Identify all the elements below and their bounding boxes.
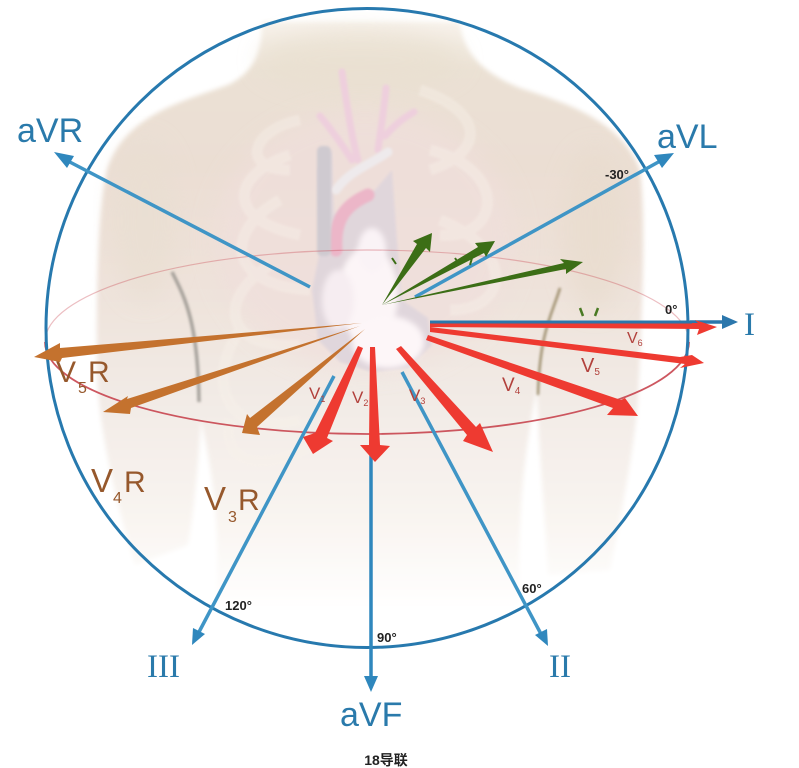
arrow: V3R bbox=[242, 329, 365, 435]
label: V1: 1 bbox=[320, 394, 325, 404]
heart illustration bbox=[312, 72, 432, 372]
label: aVF: aVF bbox=[340, 696, 402, 734]
label: V3: 3 bbox=[420, 396, 425, 406]
right-sided labels bbox=[56, 356, 260, 526]
label: V2: 2 bbox=[363, 398, 368, 408]
posterior green vectors bbox=[382, 233, 598, 316]
angle labels bbox=[225, 167, 677, 645]
label: V6: 6 bbox=[638, 338, 643, 348]
precordial red vectors bbox=[303, 320, 717, 462]
horizontal plane ellipse bbox=[45, 250, 689, 434]
label: II: II bbox=[549, 649, 571, 685]
label: V5R: R bbox=[88, 356, 110, 389]
right-sided orange vectors bbox=[34, 323, 365, 435]
arrow: V2 bbox=[360, 347, 390, 462]
label: V5R: 5 bbox=[78, 380, 87, 397]
arrow: V5R bbox=[34, 323, 362, 362]
arrow: III bbox=[192, 376, 334, 645]
precordial labels bbox=[309, 330, 643, 408]
arrow: V4 bbox=[426, 335, 638, 416]
arrow: V4R bbox=[103, 326, 360, 414]
label: aVL: aVL bbox=[657, 118, 718, 156]
label: V3R: R bbox=[238, 484, 260, 517]
label: V4: V bbox=[502, 375, 515, 396]
label: V5: 5 bbox=[594, 367, 600, 378]
label: V4: 4 bbox=[515, 386, 521, 397]
label: 0 degrees: 0° bbox=[665, 302, 677, 317]
label: V4R: V bbox=[91, 462, 113, 499]
label: V4R: 4 bbox=[113, 490, 122, 507]
label: V3R: 3 bbox=[228, 509, 237, 526]
label: 60 degrees: 60° bbox=[522, 581, 542, 596]
arrow: V1 bbox=[303, 346, 363, 454]
limb lead circle bbox=[46, 8, 688, 648]
armpit creases bbox=[172, 272, 199, 402]
arrow: V8 bbox=[382, 241, 495, 305]
arrow: I shaft bbox=[430, 320, 692, 324]
ribcage overlay bbox=[223, 90, 496, 462]
label: -30 degrees: -30° bbox=[605, 167, 629, 182]
label: 90 degrees: 90° bbox=[377, 630, 397, 645]
caption: 18导联 bbox=[364, 752, 408, 768]
torso silhouette bbox=[97, 22, 643, 610]
arrow: V7 bbox=[382, 233, 432, 305]
arrow: V9 bbox=[382, 259, 583, 305]
label: V1: V bbox=[309, 384, 320, 403]
label: V3: V bbox=[409, 386, 420, 405]
label: V5R: V bbox=[56, 356, 76, 389]
frontal limb lead axes bbox=[54, 152, 738, 692]
arrow: V3 bbox=[396, 346, 493, 452]
arrow: aVL bbox=[415, 153, 674, 297]
label: V5: V bbox=[581, 355, 594, 377]
label: V2: V bbox=[352, 388, 363, 407]
label: I: I bbox=[744, 307, 755, 343]
arrow: aVF bbox=[364, 440, 378, 692]
arrow: I head bbox=[690, 315, 738, 329]
arrow: II bbox=[402, 372, 548, 646]
label: V6: V bbox=[627, 330, 638, 347]
label: aVR: aVR bbox=[17, 112, 83, 150]
arrow: aVR bbox=[54, 152, 310, 287]
label: V3R: V bbox=[204, 480, 226, 517]
arrow: V6 bbox=[430, 320, 717, 335]
label: 120 degrees: 120° bbox=[225, 598, 252, 613]
label: V4R: R bbox=[124, 466, 146, 499]
label: III: III bbox=[147, 649, 180, 685]
arrow: V5 bbox=[430, 327, 704, 368]
